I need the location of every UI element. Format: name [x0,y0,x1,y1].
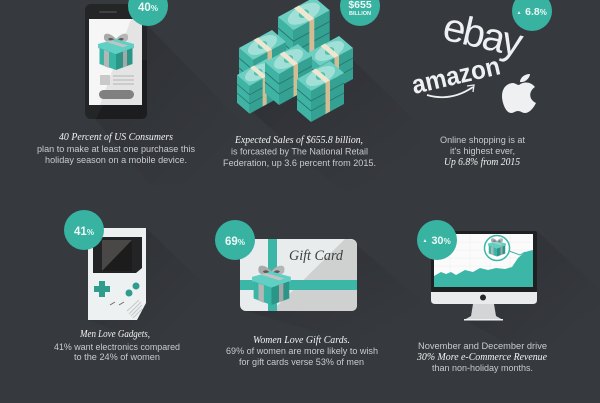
text: gift cards caption: for gift cards verse 53% of men [239,357,364,368]
badge: up 6.8%: 6.8% [525,6,547,18]
text: gift cards caption: Women Love Gift Cards. [253,334,350,346]
icon: gift card [240,239,357,311]
text: revenue caption [416,341,547,374]
gameboy shadow [88,228,200,340]
panel: mobile shoppers [37,0,240,185]
text: men love gadgets caption: to the 24% of women [74,352,160,363]
badge: 69% [215,220,255,260]
logo: ebay: ebay [439,5,527,66]
text: expected sales caption: Expected Sales of $655.8 billion, [234,134,363,146]
text: mobile shoppers caption: plan to make at least one purchase this [37,144,195,155]
text: mobile shoppers caption: 40 Percent of US Consumers [59,131,173,143]
badge: up 6.8% [512,0,552,31]
badge: up 30%: ▲ [423,238,427,244]
money shadow [250,60,420,190]
text: revenue caption: than non-holiday months. [432,363,533,374]
logo: apple [502,74,536,113]
text: mobile shoppers caption: holiday season on a mobile device. [45,155,187,166]
monitor shadow [465,231,600,345]
text: online shopping caption [440,135,525,168]
text: gift cards caption [226,334,378,368]
panel: expected sales [223,0,420,190]
icon: handheld game console [88,228,146,320]
icon: stacks of money [237,0,353,122]
icon: gift card: Gift Card [289,248,343,264]
badge: 41% [64,210,104,250]
badge: 69%: 69% [225,236,245,248]
text: revenue caption: 30% More e-Commerce Revenue [416,351,547,363]
text: expected sales caption: is forcasted by The National Retail [231,146,368,158]
panel: online shopping [409,0,552,168]
text: men love gadgets caption [54,328,180,363]
badge: 40%: 40% [138,2,158,14]
phone shadow [95,25,240,185]
badge: $655 billion [340,0,380,26]
text: online shopping caption: Up 6.8% from 2015 [444,156,521,168]
icon: monitor with chart [431,231,537,320]
text: mobile shoppers caption [37,131,195,166]
text: men love gadgets caption: 41% want electronics compared [54,342,180,353]
text: men love gadgets caption: Men Love Gadgets, [79,328,150,340]
panel: e-commerce revenue [416,220,600,374]
badge: 40% [128,0,168,26]
badge: up 6.8%: ▲ [517,10,521,16]
badge: up 30%: 30% [431,235,451,247]
badge: up 30% [417,220,457,260]
text: expected sales caption: Federation, up 3.6 percent from 2015. [223,158,376,169]
icon: phone with gift [85,4,147,119]
panel: women love gift cards [215,220,420,368]
text: gift cards caption: 69% of women are more likely to wish [226,346,378,357]
text: revenue caption: November and December drive [418,341,547,352]
logo: amazon: amazon [409,50,503,100]
panel: men love gadgets [54,210,200,363]
gift card shadow [245,245,420,340]
badge: 41%: 41% [74,226,94,238]
text: online shopping caption: it's highest ever, [450,146,515,157]
text: online shopping caption: Online shopping is at [440,135,525,146]
badge: $655 billion: BILLION [349,11,371,17]
text: expected sales caption [223,134,376,169]
